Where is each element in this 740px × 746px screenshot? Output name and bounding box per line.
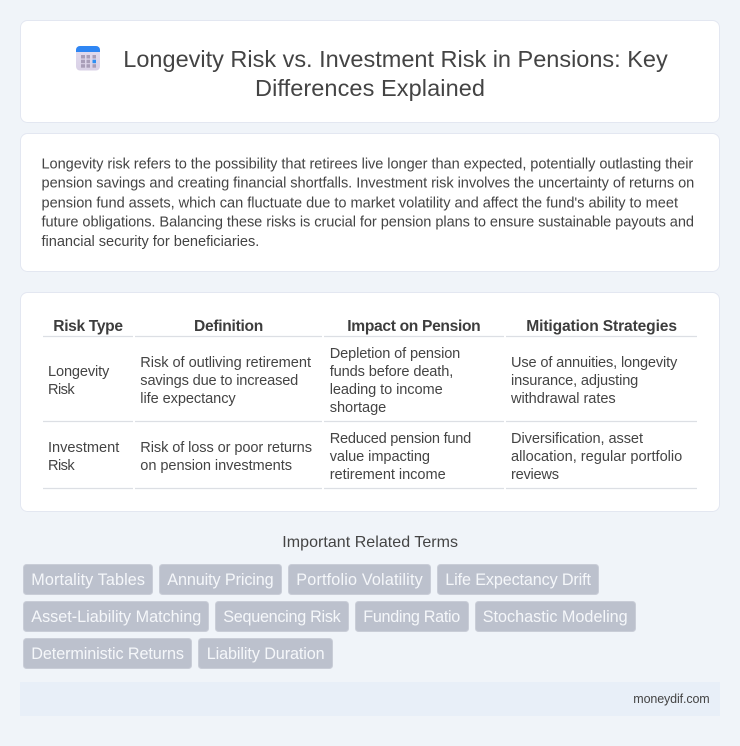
table row: investment risk: Diversification, asset <box>511 431 643 447</box>
intro paragraph: future obligations. Balancing these risks is crucial for pension plans to ensure sustainable payouts and <box>42 215 694 231</box>
table row: longevity risk: Risk of outliving retirement <box>140 355 311 371</box>
table row: longevity risk: Longevity <box>48 364 110 380</box>
tags: related terms: Funding Ratio <box>363 608 460 626</box>
panel: title card <box>20 20 720 122</box>
tags: related terms: Sequencing Risk <box>223 608 342 626</box>
table row: longevity risk: funds before death, <box>330 364 453 380</box>
title: Longevity Risk vs. Investment Risk in Pensions: Key <box>123 46 668 72</box>
tags: related terms <box>24 564 636 668</box>
icon: calendar <box>76 46 100 70</box>
title: Differences Explained <box>255 75 485 101</box>
table row: longevity risk: savings due to increased <box>140 373 298 389</box>
table row: investment risk: Risk <box>48 458 75 474</box>
table row: investment risk: Reduced pension fund <box>330 431 471 447</box>
table row: investment risk: reviews <box>511 467 559 483</box>
tags: related terms: Mortality Tables <box>31 571 145 589</box>
table row: longevity risk: insurance, adjusting <box>511 373 638 389</box>
table header: Definition <box>194 318 263 335</box>
table row: longevity risk: shortage <box>330 400 386 416</box>
heading: related terms: Important Related Terms <box>282 534 458 551</box>
title <box>123 46 668 101</box>
table row: longevity risk <box>43 346 697 422</box>
table header <box>43 318 697 336</box>
tags: related terms: Asset-Liability Matching <box>31 608 201 626</box>
table row: longevity risk: Depletion of pension <box>330 346 460 362</box>
table row: investment risk: value impacting <box>330 449 430 465</box>
table header: Impact on Pension <box>347 318 481 335</box>
tags: related terms: Life Expectancy Drift <box>445 571 592 589</box>
tags: related terms: Annuity Pricing <box>167 571 274 589</box>
table header: Risk Type <box>53 318 123 335</box>
table row: longevity risk: Risk <box>48 382 75 398</box>
intro paragraph: financial security for beneficiaries. <box>42 234 259 250</box>
tags: related terms: Portfolio Volatility <box>296 571 424 589</box>
table row: investment risk: on pension investments <box>140 458 292 474</box>
footer bar <box>20 682 720 716</box>
table row: investment risk: Investment <box>48 440 119 456</box>
table header: Mitigation Strategies <box>526 318 677 335</box>
table row: investment risk: allocation, regular portfolio <box>511 449 682 465</box>
table row: investment risk <box>43 431 697 488</box>
table row: investment risk: retirement income <box>330 467 446 483</box>
tags: related terms: Stochastic Modeling <box>483 608 628 626</box>
table row: longevity risk: withdrawal rates <box>510 391 616 407</box>
panel: introduction text <box>20 134 720 272</box>
intro paragraph: Longevity risk refers to the possibility that retirees live longer than expected, potentially outlasting their <box>42 156 693 172</box>
footer source text: moneydif.com <box>633 692 710 706</box>
table row: investment risk: Risk of loss or poor returns <box>140 440 312 456</box>
intro paragraph: pension savings and creating financial shortfalls. Investment risk involves the uncertainty of returns on <box>42 176 694 192</box>
table row: longevity risk: Use of annuities, longevity <box>511 355 678 371</box>
table row: longevity risk: leading to income <box>330 382 443 398</box>
tags: related terms: Deterministic Returns <box>31 645 184 663</box>
table row: longevity risk: life expectancy <box>140 391 236 407</box>
tags: related terms: Liability Duration <box>207 645 325 663</box>
intro paragraph <box>42 156 694 250</box>
intro paragraph: pension fund assets, which can fluctuate due to market volatility and affect the fund's ability to meet <box>42 195 678 211</box>
panel: comparison table <box>20 292 720 512</box>
